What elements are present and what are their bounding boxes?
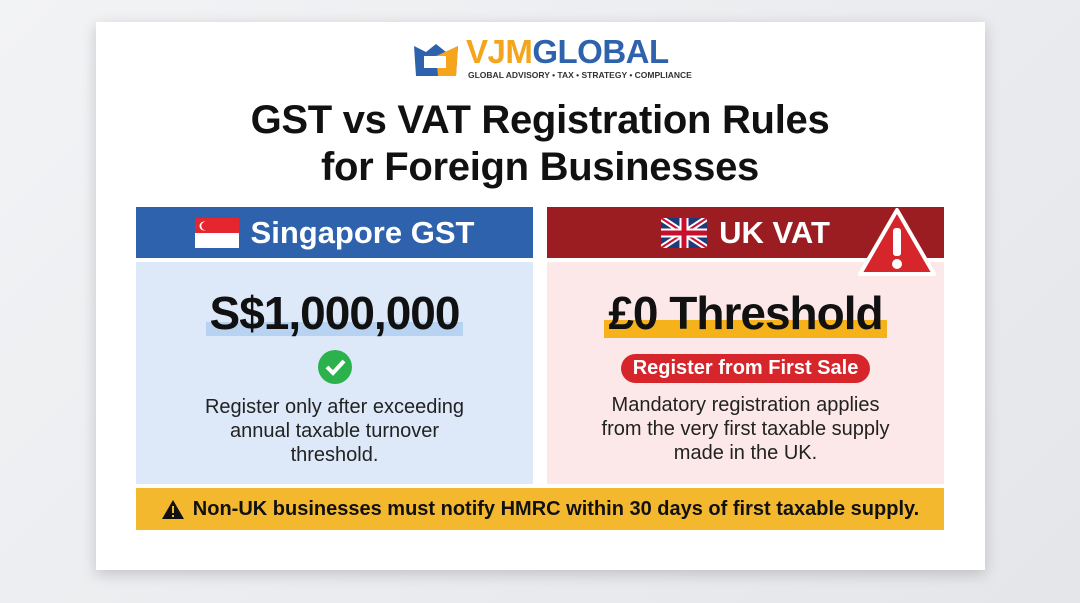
body: [136, 262, 533, 484]
logo: [414, 33, 692, 80]
title: for Foreign Businesses: [321, 145, 759, 189]
title: GST vs VAT Registration Rules: [251, 98, 829, 142]
description: annual taxable turnover: [230, 420, 439, 442]
logo text: VJMGLOBAL: [466, 33, 669, 70]
header: Singapore GST: Singapore GST: [251, 214, 474, 250]
description: [205, 396, 464, 466]
banner: [136, 488, 944, 530]
description: Mandatory registration applies: [612, 394, 879, 416]
description: threshold.: [291, 444, 378, 466]
panel: UK VAT: [547, 207, 944, 484]
icon: logo mark: [414, 44, 458, 76]
panel: Singapore GST: [136, 207, 533, 484]
banner: Non-UK businesses must notify HMRC within 30 days of first taxable supply.: [193, 498, 919, 520]
icon: warning triangle: [858, 208, 936, 276]
tagline: GLOBAL ADVISORY • TAX • STRATEGY • COMPLIANCE: [468, 70, 692, 80]
icon: warning: [162, 500, 184, 519]
title: [251, 98, 829, 189]
icon: check: [318, 350, 352, 384]
header: UK VAT: [547, 207, 944, 258]
body: [547, 262, 944, 484]
icon: Singapore flag: [195, 218, 239, 248]
description: Register only after exceeding: [205, 396, 464, 418]
description: from the very first taxable supply: [602, 418, 889, 440]
header: UK VAT: UK VAT: [719, 214, 830, 250]
description: made in the UK.: [674, 442, 817, 464]
icon: UK flag: [661, 218, 707, 248]
amount: £0 Threshold: [608, 287, 883, 339]
card: [96, 22, 985, 570]
pill: Register from First Sale: [633, 357, 858, 379]
amount: S$1,000,000: [210, 287, 459, 339]
header: Singapore GST: [136, 207, 533, 258]
description: [602, 394, 890, 464]
